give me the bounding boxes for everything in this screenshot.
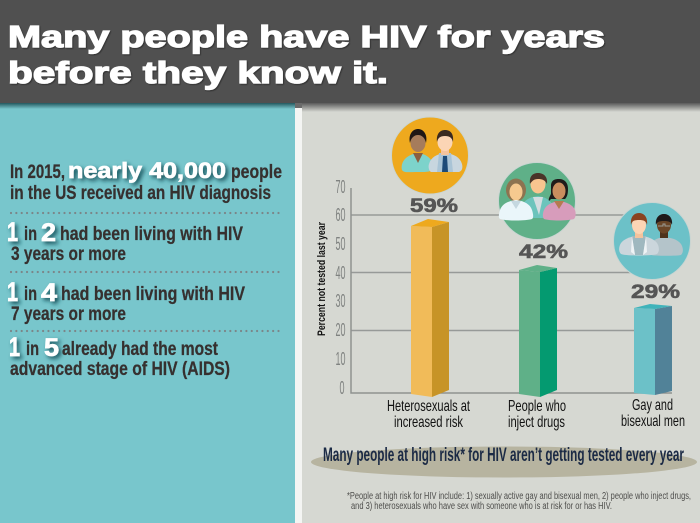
stat: 1 in 2: 3 years or more: [11, 244, 126, 265]
stat: 1 in 4: 4: [41, 279, 57, 307]
bar: gay and bisexual men 29%: [634, 304, 672, 395]
value: 42%: 42%: [519, 242, 568, 263]
stat: 40,000 diagnoses: [10, 158, 282, 204]
bar chart: 10: [336, 349, 346, 369]
right panel background: [302, 103, 700, 523]
y axis ticks: [336, 177, 346, 398]
bar: heterosexuals 59%: [411, 219, 449, 397]
stat: 1 in 4: had been living with HIV: [61, 284, 245, 305]
label: gay and bisexual men: [621, 397, 685, 430]
stat: 1 in 2: [7, 217, 243, 265]
label: people who inject drugs: [508, 398, 566, 431]
bar: people who inject drugs 42%: [519, 265, 557, 397]
stat: 40,000 diagnoses: In 2015,: [10, 162, 65, 183]
label: gay and bisexual men: Gay and: [632, 397, 673, 414]
footnote: [347, 491, 691, 512]
icon: heterosexual couple in orange circle: [392, 117, 468, 194]
stat: 1 in 5: in: [26, 339, 39, 360]
stat: 1 in 2: in: [24, 224, 37, 245]
bar chart: 60: [336, 205, 346, 225]
bar chart: 40: [336, 263, 346, 283]
stat: 1 in 2: 1: [7, 217, 18, 247]
title banner: [0, 0, 700, 103]
bar chart: 50: [336, 234, 346, 254]
stat: 1 in 2: 2: [41, 219, 56, 247]
stat: 1 in 5: [9, 332, 230, 380]
stat: 1 in 5: advanced stage of HIV (AIDS): [10, 359, 230, 380]
stat: 40,000 diagnoses: nearly 40,000: [68, 158, 226, 183]
title banner: before they know it.: [8, 55, 388, 90]
stat: 40,000 diagnoses: in the US received an HIV diagnosis: [10, 183, 271, 204]
stat: 1 in 2: had been living with HIV: [60, 224, 243, 245]
icon: three people in green circle: [498, 162, 576, 240]
value: 59%: 59%: [410, 196, 458, 217]
icon: two men in teal circle: [614, 202, 690, 280]
bar chart: 70: [336, 177, 346, 197]
label: heterosexuals: [387, 398, 470, 431]
white divider strip: [295, 103, 302, 523]
stat: 1 in 4: 1: [7, 277, 18, 307]
stat: 1 in 5: 1: [9, 332, 20, 362]
label: heterosexuals: increased risk: [394, 414, 464, 431]
footnote: and 3) heterosexuals who have sex with someone who is at risk for or has HIV.: [351, 501, 612, 512]
y axis ticks: 0: [340, 378, 344, 398]
bar chart: 20: [336, 320, 346, 340]
stat: 40,000 diagnoses: people: [231, 162, 282, 183]
bar chart: 30: [336, 291, 346, 311]
label: heterosexuals: Heterosexuals at: [387, 398, 470, 415]
label: people who inject drugs: People who: [508, 398, 566, 415]
y axis title: Percent not tested last year: [316, 221, 328, 336]
stat: 1 in 4: in: [24, 284, 37, 305]
title banner: Many people have HIV for years: [8, 19, 605, 54]
stat: 1 in 4: 7 years or more: [11, 304, 126, 325]
label: people who inject drugs: inject drugs: [508, 414, 565, 431]
value: 29%: 29%: [631, 282, 680, 303]
stat: 1 in 4: [7, 277, 245, 325]
callout: testing message: [311, 445, 697, 478]
stat: 1 in 5: 5: [44, 334, 59, 362]
bar chart: [316, 177, 685, 431]
stat: 1 in 5: already had the most: [62, 339, 219, 360]
